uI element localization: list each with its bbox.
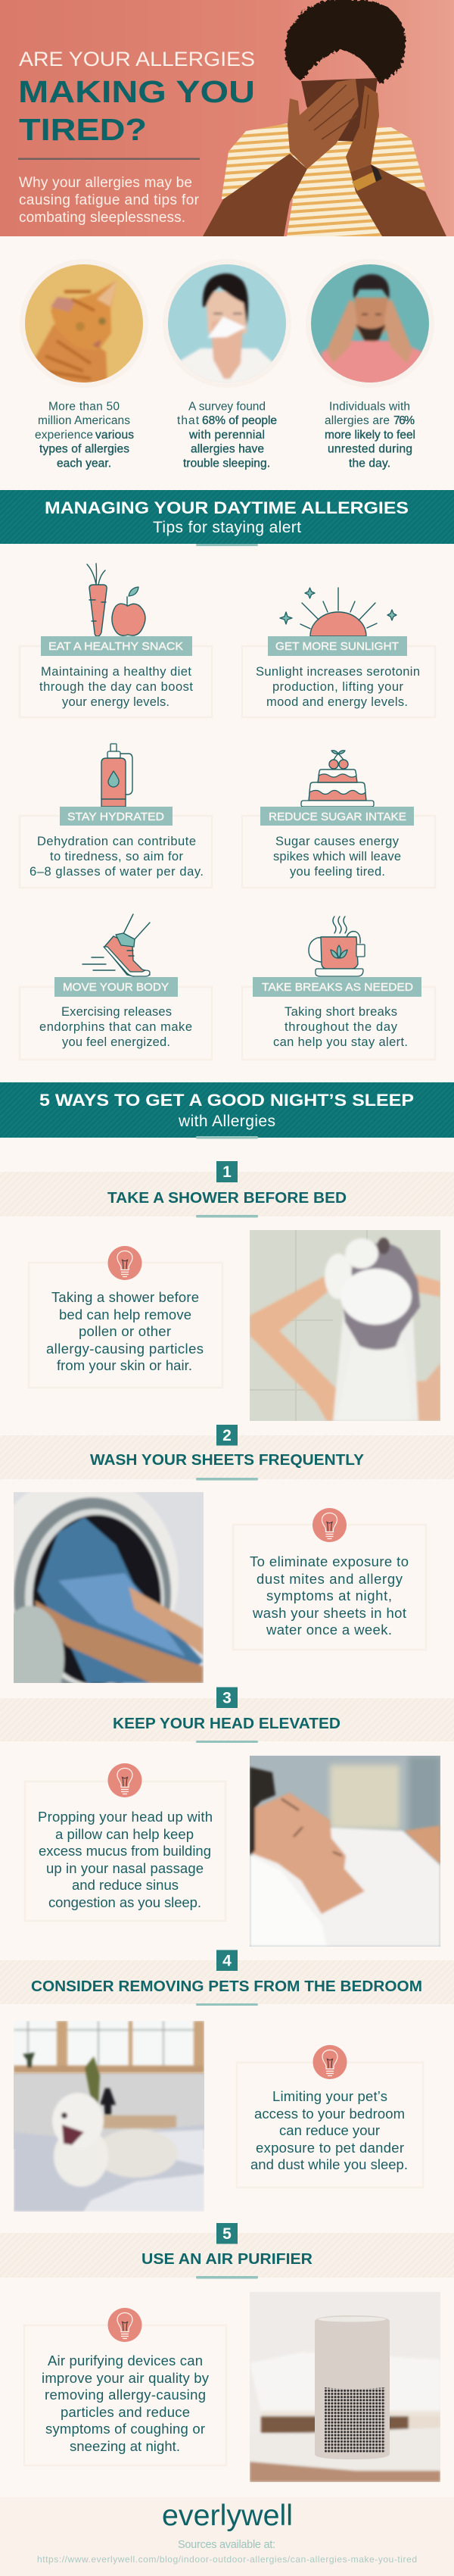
icon: tea mug bbox=[309, 916, 365, 976]
label: move your body bbox=[54, 977, 178, 997]
icon: cake bbox=[301, 751, 374, 807]
hero title bbox=[18, 48, 255, 147]
tip text: and dust while you sleep. bbox=[250, 2156, 408, 2172]
tip text: To eliminate exposure to bbox=[250, 1553, 409, 1569]
tip text: congestion as you sleep. bbox=[48, 1894, 201, 1910]
tip text bbox=[250, 1553, 409, 1638]
photo: woman washing hair bbox=[250, 1230, 440, 1421]
number badge 4: 4 bbox=[222, 1953, 232, 1969]
text: sunlight: mood and energy levels. bbox=[266, 695, 408, 709]
text: move: you feel energized. bbox=[62, 1035, 170, 1049]
stat 2 text: that bbox=[177, 414, 200, 427]
stat 3 text: allergies are bbox=[325, 414, 390, 427]
tip text: wash your sheets in hot bbox=[252, 1605, 406, 1621]
banner: 5 ways to get a good night's sleep: with Allergies bbox=[178, 1113, 275, 1130]
heading: USE AN AIR PURIFIER bbox=[141, 2250, 313, 2268]
icon: light bulb bbox=[313, 1508, 347, 1542]
tip text bbox=[38, 1809, 213, 1910]
label: stay hydrated: STAY HYDRATED bbox=[67, 811, 164, 823]
text: hydrated: Dehydration can contribute bbox=[37, 835, 196, 848]
label: stay hydrated bbox=[60, 807, 173, 826]
hero panel bbox=[0, 0, 454, 236]
text: sunlight bbox=[256, 665, 420, 709]
hero title: ARE YOUR ALLERGIES bbox=[19, 48, 255, 70]
hero subtitle: combating sleeplessness. bbox=[19, 210, 185, 226]
text: snack bbox=[39, 665, 193, 709]
icon: carrot and apple bbox=[87, 564, 145, 636]
tip text: from your skin or hair. bbox=[57, 1357, 192, 1373]
stat 1 text: each year. bbox=[57, 457, 111, 470]
tip text: pollen or other bbox=[79, 1323, 171, 1339]
text: move bbox=[39, 1005, 192, 1049]
text: breaks: can help you stay alert. bbox=[273, 1035, 408, 1049]
icon: light bulb bbox=[107, 2308, 142, 2342]
stat 1 text bbox=[35, 401, 134, 470]
stat 2: woman sneezing photo bbox=[168, 264, 286, 382]
heading: KEEP YOUR HEAD ELEVATED bbox=[113, 1715, 340, 1732]
stat 1 text: More than 50 bbox=[48, 401, 120, 414]
text: sunlight: Sunlight increases serotonin bbox=[256, 665, 420, 679]
stat 2 text: A survey found bbox=[188, 401, 266, 414]
text: breaks: throughout the day bbox=[285, 1020, 398, 1034]
footer bbox=[0, 2497, 454, 2576]
banner: managing your daytime allergies: MANAGING YOUR DAYTIME ALLERGIES bbox=[45, 498, 409, 517]
text: snack: your energy levels. bbox=[62, 695, 169, 709]
photo: man sleeping on pillow bbox=[250, 1756, 440, 1947]
stat 1 text: experience bbox=[35, 429, 93, 442]
section 2: wash your sheets frequently bbox=[0, 1425, 454, 1683]
hero subtitle: Why your allergies may be bbox=[19, 175, 192, 191]
tip text: Limiting your pet’s bbox=[272, 2088, 387, 2104]
tip text: Air purifying devices can bbox=[48, 2353, 203, 2368]
tip text: water once a week. bbox=[266, 1622, 392, 1638]
tip text: a pillow can help keep bbox=[55, 1826, 194, 1842]
number badge 2: 2 bbox=[222, 1427, 232, 1444]
tip text: up in your nasal passage bbox=[46, 1860, 204, 1876]
tip text: symptoms of coughing or bbox=[45, 2421, 205, 2437]
section 1: take a shower before bed bbox=[0, 1161, 454, 1421]
panel: statistics bbox=[20, 259, 434, 470]
banner: 5 ways to get a good night's sleep bbox=[0, 1082, 454, 1139]
label: take breaks as needed bbox=[253, 977, 421, 997]
tip text: symptoms at night, bbox=[266, 1588, 392, 1603]
tip text: can reduce your bbox=[279, 2122, 380, 2138]
stat 1 text: million Americans bbox=[38, 414, 130, 427]
number badge 2 bbox=[216, 1425, 238, 1445]
label: take breaks as needed: TAKE BREAKS AS NEEDED bbox=[262, 982, 413, 994]
tip text bbox=[42, 2353, 210, 2454]
text: move: Exercising releases bbox=[61, 1005, 172, 1019]
tip text: bed can help remove bbox=[59, 1307, 191, 1322]
panel: move your body bbox=[20, 914, 212, 1060]
stat 1 text: various bbox=[95, 429, 134, 442]
stat 3: man with headache photo bbox=[311, 264, 429, 382]
text: hydrated bbox=[30, 835, 204, 879]
tip text: sneezing at night. bbox=[70, 2438, 180, 2454]
tip text: Propping your head up with bbox=[38, 1809, 213, 1825]
text: sugar bbox=[273, 835, 401, 879]
number badge 1 bbox=[216, 1161, 238, 1182]
number badge 3 bbox=[216, 1688, 238, 1708]
label: get more sunlight bbox=[268, 636, 407, 656]
panel: stay hydrated bbox=[20, 744, 212, 888]
sources text bbox=[37, 2539, 417, 2565]
icon: light bulb bbox=[107, 1763, 142, 1797]
tip text: removing allergy-causing bbox=[45, 2387, 206, 2403]
sources text: Sources available at: bbox=[178, 2539, 275, 2551]
number badge 1: 1 bbox=[222, 1163, 232, 1181]
icon: light bulb bbox=[313, 2045, 347, 2079]
tip text: exposure to pet dander bbox=[256, 2140, 404, 2156]
label: get more sunlight: GET MORE SUNLIGHT bbox=[275, 641, 399, 653]
label: reduce sugar intake: REDUCE SUGAR INTAKE bbox=[269, 811, 406, 823]
section 3: keep your head elevated bbox=[0, 1688, 454, 1947]
text: breaks: Taking short breaks bbox=[285, 1005, 397, 1019]
stat 3 text: 76% bbox=[393, 414, 415, 427]
stat 3 text: unrested during bbox=[328, 443, 412, 456]
stat 3 text bbox=[325, 401, 415, 470]
text: breaks bbox=[273, 1005, 408, 1049]
stat 3 text: Individuals with bbox=[329, 401, 410, 414]
stat 1: cat photo bbox=[25, 264, 143, 382]
photo: air purifier in bedroom bbox=[250, 2292, 440, 2482]
panel: take breaks as needed bbox=[242, 916, 435, 1060]
text card bbox=[25, 1763, 225, 1921]
stat 2 text: trouble sleeping. bbox=[183, 457, 270, 470]
stat 3 text: the day. bbox=[349, 457, 390, 470]
label: move your body: MOVE YOUR BODY bbox=[63, 982, 169, 994]
heading: CONSIDER REMOVING PETS FROM THE BEDROOM bbox=[31, 1978, 422, 1995]
text: hydrated: to tiredness, so aim for bbox=[50, 850, 183, 863]
tip text: dust mites and allergy bbox=[257, 1571, 403, 1587]
stat 2 text: 68% of people bbox=[202, 414, 277, 427]
banner: 5 ways to get a good night's sleep: 5 WAYS TO GET A GOOD NIGHT’S SLEEP bbox=[39, 1091, 414, 1110]
icon: light bulb bbox=[107, 1246, 142, 1280]
text: sugar: spikes which will leave bbox=[273, 850, 401, 863]
stat 1 text: types of allergies bbox=[39, 443, 129, 456]
tip text: Taking a shower before bbox=[51, 1289, 199, 1305]
icon: water bottle bbox=[101, 744, 132, 807]
tip text: excess mucus from building bbox=[39, 1843, 211, 1859]
heading: TAKE A SHOWER BEFORE BED bbox=[107, 1189, 347, 1207]
panel: get more sunlight bbox=[242, 588, 435, 717]
text: snack: through the day can boost bbox=[39, 680, 193, 694]
tip text: allergy-causing particles bbox=[46, 1341, 204, 1357]
text card bbox=[237, 2045, 423, 2187]
text card bbox=[29, 1246, 222, 1388]
text: hydrated: 6–8 glasses of water per day. bbox=[30, 865, 204, 879]
tip text: particles and reduce bbox=[61, 2404, 190, 2420]
stat 2 text: allergies have bbox=[191, 443, 264, 456]
icon: running shoe bbox=[82, 914, 150, 976]
icon: sun bbox=[280, 588, 396, 636]
stat 3 text: more likely to feel bbox=[325, 429, 415, 442]
label: reduce sugar intake bbox=[260, 807, 414, 826]
text: sugar: you feeling tired. bbox=[290, 865, 385, 879]
number badge 3: 3 bbox=[222, 1689, 232, 1707]
text card bbox=[24, 2308, 226, 2465]
tip text bbox=[46, 1289, 204, 1373]
tip text: improve your air quality by bbox=[42, 2370, 210, 2386]
stat 2 text: with perennial bbox=[188, 429, 265, 442]
tip text bbox=[250, 2088, 408, 2172]
number badge 5: 5 bbox=[222, 2225, 232, 2243]
hero title: MAKING YOU bbox=[18, 74, 255, 109]
hero subtitle: causing fatigue and tips for bbox=[19, 192, 200, 208]
panel: eat a healthy snack bbox=[20, 564, 212, 717]
text: move: endorphins that can make bbox=[39, 1020, 192, 1034]
hero title: TIRED? bbox=[19, 112, 147, 147]
text: sunlight: production, lifting your bbox=[272, 680, 404, 694]
tip text: access to your bedroom bbox=[254, 2106, 405, 2122]
section 4: consider removing pets bbox=[0, 1950, 454, 2212]
photo: dog yawning on bed bbox=[14, 2021, 204, 2212]
photo: sheets in washing machine bbox=[14, 1492, 204, 1683]
section 5: use an air purifier bbox=[0, 2223, 454, 2482]
number badge 5 bbox=[216, 2223, 238, 2243]
tip text: and reduce sinus bbox=[72, 1877, 179, 1893]
panel: reduce sugar intake bbox=[242, 751, 435, 888]
label: eat a healthy snack bbox=[41, 636, 192, 656]
logo: everlywell: everlywell bbox=[162, 2500, 293, 2532]
text card bbox=[233, 1508, 426, 1650]
stat 2 text bbox=[177, 401, 277, 470]
label: eat a healthy snack: EAT A HEALTHY SNACK bbox=[48, 641, 183, 653]
hero subtitle bbox=[19, 175, 200, 226]
text: snack: Maintaining a healthy diet bbox=[41, 665, 191, 679]
hero photo: tired man rubbing eyes bbox=[203, 0, 446, 236]
number badge 4 bbox=[216, 1950, 238, 1971]
banner: managing your daytime allergies: Tips for staying alert bbox=[153, 519, 301, 536]
text: sugar: Sugar causes energy bbox=[275, 835, 400, 848]
banner: managing your daytime allergies bbox=[0, 490, 454, 546]
sources text: https://www.everlywell.com/blog/indoor-outdoor-allergies/can-allergies-make-you-tired bbox=[37, 2554, 417, 2565]
heading: WASH YOUR SHEETS FREQUENTLY bbox=[90, 1451, 364, 1469]
